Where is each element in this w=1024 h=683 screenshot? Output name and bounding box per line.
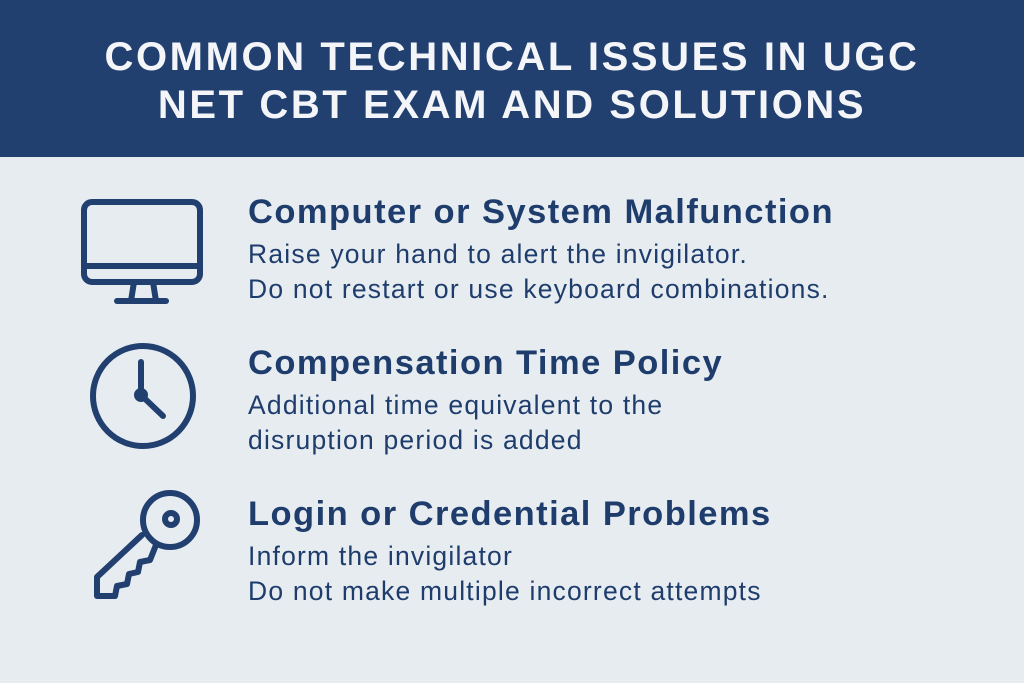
item: compensation time: disruption period is added [248,425,583,455]
title: COMMON TECHNICAL ISSUES IN UGC [104,35,920,79]
item: login problems [248,495,772,606]
icon: clock [93,346,193,446]
item: login problems: Login or Credential Problems [248,495,772,533]
icon: key [97,493,197,596]
item: computer malfunction [248,193,834,304]
title: NET CBT EXAM AND SOLUTIONS [158,83,866,127]
item: compensation time [248,344,723,455]
item: computer malfunction: Computer or System Malfunction [248,193,834,231]
title [0,0,1024,157]
item: computer malfunction: Do not restart or use keyboard combinations. [248,274,830,304]
item: login problems: Inform the invigilator [248,541,513,571]
item: computer malfunction: Raise your hand to alert the invigilator. [248,239,748,269]
item: compensation time: Additional time equivalent to the [248,390,663,420]
item: login problems: Do not make multiple incorrect attempts [248,576,762,606]
item: compensation time: Compensation Time Policy [248,344,723,382]
icon: monitor [84,202,200,301]
